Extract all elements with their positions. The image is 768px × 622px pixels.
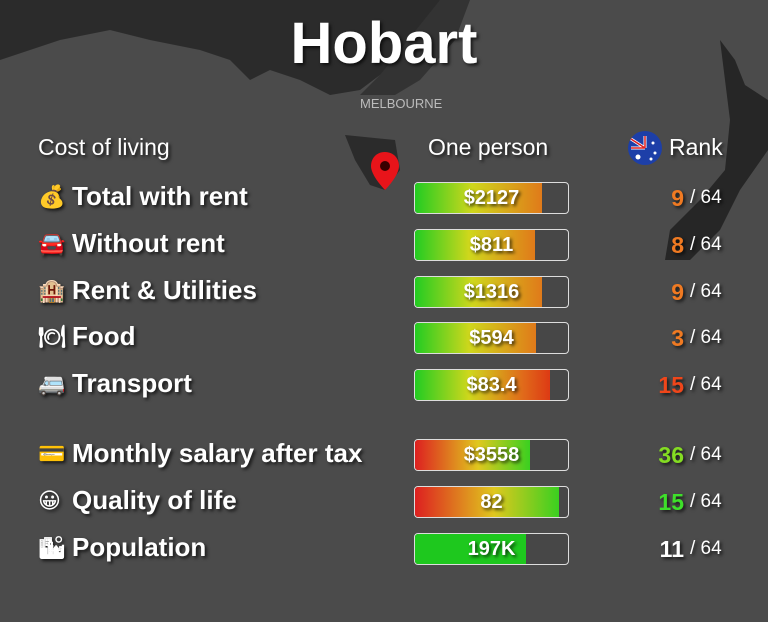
- row: without rent: $811: [470, 234, 513, 256]
- row: population: [38, 532, 724, 565]
- row: rent & utilities: 🏨: [38, 278, 65, 303]
- row: total with rent: Total with rent: [72, 181, 248, 211]
- row: population: 197K: [468, 538, 515, 560]
- row: transport: 15: [658, 372, 684, 398]
- row: rent & utilities: [38, 275, 724, 308]
- row: food: [38, 321, 724, 354]
- row: food: Food: [72, 321, 136, 351]
- row: transport: Transport: [72, 368, 192, 398]
- header: one person: One person: [428, 134, 548, 160]
- row: rent & utilities: Rent & Utilities: [72, 275, 257, 305]
- row: quality of life: 😀: [38, 488, 61, 513]
- row: quality of life: 15: [658, 489, 684, 515]
- row: transport: 🚐: [38, 371, 65, 396]
- row: monthly salary: Monthly salary after tax: [72, 438, 362, 468]
- row: monthly salary: 36: [658, 442, 684, 468]
- row: total with rent: 💰: [38, 184, 65, 209]
- row: rent & utilities: 9: [671, 279, 684, 305]
- row: total with rent: / 64: [690, 187, 722, 208]
- row: food: 3: [671, 325, 684, 351]
- header: rank: [628, 131, 725, 165]
- row: monthly salary: [38, 438, 724, 471]
- row: quality of life: Quality of life: [72, 485, 237, 515]
- row: food: 🍽: [38, 324, 66, 349]
- row: without rent: 8: [671, 232, 684, 258]
- row: without rent: Without rent: [72, 228, 225, 258]
- row: without rent: [38, 228, 724, 261]
- row: food: $594: [469, 327, 514, 349]
- row: without rent: 🚘: [38, 231, 65, 256]
- row: quality of life: 82: [480, 491, 503, 513]
- header: cost of living: Cost of living: [38, 134, 170, 160]
- row: without rent: / 64: [690, 234, 722, 255]
- row: total with rent: $2127: [464, 187, 519, 209]
- row: population: 🏙: [38, 535, 66, 560]
- row: transport: [38, 368, 724, 401]
- row: quality of life: [38, 485, 724, 518]
- icon: australian flag: [628, 131, 662, 165]
- row: monthly salary: / 64: [690, 444, 722, 465]
- row: population: Population: [72, 532, 206, 562]
- row: transport: $83.4: [466, 374, 517, 396]
- row: monthly salary: 💳: [38, 441, 65, 466]
- row: food: / 64: [690, 327, 722, 348]
- row: population: 11: [660, 536, 684, 562]
- row: quality of life: / 64: [690, 491, 722, 512]
- row: transport: / 64: [690, 374, 722, 395]
- icon: map pin: [371, 152, 399, 190]
- row: total with rent: [38, 181, 722, 214]
- row: population: / 64: [690, 538, 722, 559]
- title: Hobart: [291, 11, 477, 76]
- header: rank: Rank: [669, 134, 723, 160]
- row: rent & utilities: $1316: [464, 281, 519, 303]
- row: monthly salary: $3558: [464, 444, 519, 466]
- row: rent & utilities: / 64: [690, 281, 722, 302]
- row: total with rent: 9: [671, 185, 684, 211]
- map label: melbourne: MELBOURNE: [360, 96, 442, 111]
